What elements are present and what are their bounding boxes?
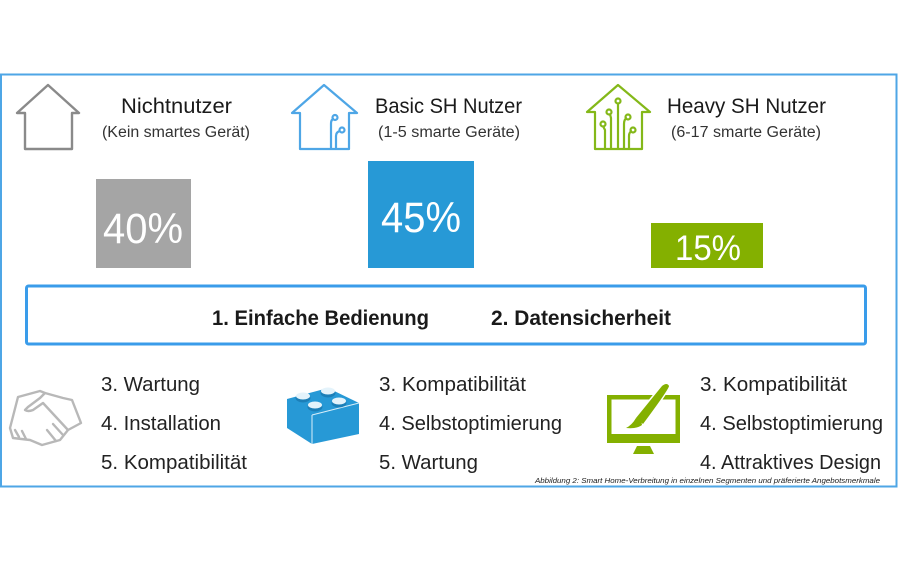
- subheading: 1-5 smarte Geräte: (1-5 smarte Geräte): [378, 124, 520, 141]
- icon: house with two circuit lines: [292, 85, 357, 149]
- icon: handshake: [10, 391, 81, 445]
- bar: 40%: [96, 179, 191, 268]
- bar: 15%: [651, 223, 763, 268]
- list: Nichtnutzer features: 5. Kompatibilität: [101, 452, 247, 474]
- icon: empty house: [17, 85, 79, 149]
- list: Nichtnutzer features: 4. Installation: [101, 413, 221, 435]
- icon: building block: [287, 388, 359, 444]
- heading: Nichtnutzer: Nichtnutzer: [121, 94, 232, 118]
- list: Basic features: 4. Selbstoptimierung: [379, 413, 562, 435]
- outer frame: [1, 74, 896, 486]
- list: Basic features: 5. Wartung: [379, 452, 478, 474]
- list: Heavy features: [700, 374, 883, 474]
- icon: monitor with paintbrush: [607, 384, 680, 454]
- list: Heavy features: 4. Selbstoptimierung: [700, 413, 883, 435]
- feature 1: 1. Einfache Bedienung: [212, 307, 429, 330]
- heading: Basic SH Nutzer: Basic SH Nutzer: [375, 94, 522, 118]
- segment: Basic SH Nutzer: [292, 85, 522, 268]
- icon: house with circuit lines: [587, 85, 650, 149]
- list: Basic features: 3. Kompatibilität: [379, 374, 526, 396]
- heading: Heavy SH Nutzer: Heavy SH Nutzer: [667, 94, 826, 118]
- panel: top shared features: [26, 286, 866, 344]
- caption: Abbildung 2: Smart Home-Verbreitung in einzelnen Segmenten und präferierte Angebotsmerkmale: [534, 476, 880, 485]
- list: Nichtnutzer features: [101, 374, 247, 474]
- list: Basic features: [379, 374, 562, 474]
- list: Nichtnutzer features: 3. Wartung: [101, 374, 200, 396]
- list: Heavy features: 3. Kompatibilität: [700, 374, 847, 396]
- value: 15%: 15%: [675, 229, 741, 268]
- value: 45%: 45%: [381, 194, 461, 242]
- value: 40%: 40%: [103, 205, 183, 253]
- list: Heavy features: 4. Attraktives Design: [700, 452, 881, 474]
- subheading: 6-17 smarte Geräte: (6-17 smarte Geräte): [671, 124, 821, 141]
- segment: Heavy SH Nutzer: [587, 85, 826, 268]
- subheading: Kein smartes Gerät: (Kein smartes Gerät): [102, 124, 250, 141]
- segment: Nichtnutzer: [17, 85, 250, 268]
- feature 2: 2. Datensicherheit: [491, 307, 671, 330]
- bar: 45%: [368, 161, 474, 268]
